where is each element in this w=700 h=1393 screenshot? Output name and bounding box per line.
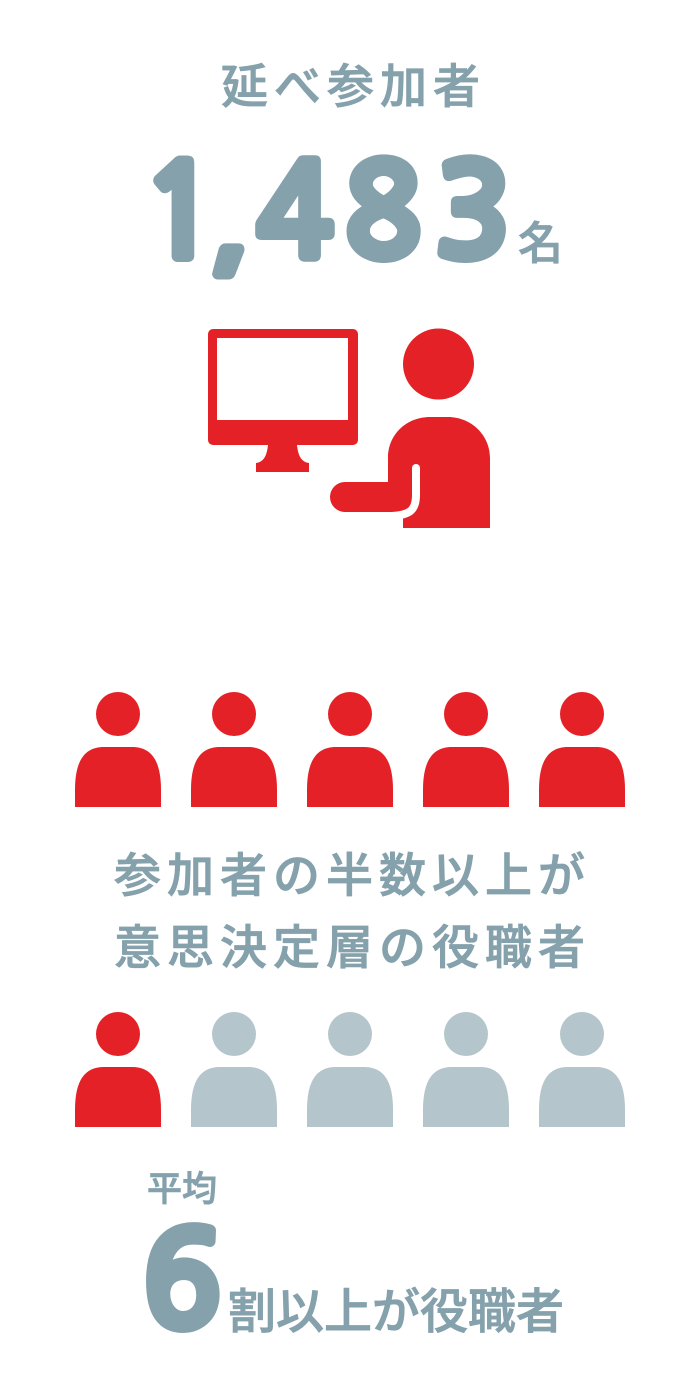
number: 1,483 participants: 8 bbox=[344, 150, 422, 277]
icon: person body bbox=[388, 417, 490, 528]
pictogram row: five red people bbox=[75, 692, 625, 807]
number: 1,483 participants: 3 bbox=[434, 150, 512, 277]
number: 1,483 participants bbox=[141, 150, 563, 277]
text: over half of participants are decision-making executives bbox=[114, 849, 591, 974]
statistic: over 60 percent are executives: 割以上が役職者 bbox=[228, 1286, 564, 1339]
icon: person head bbox=[403, 328, 474, 400]
number: 1,483 participants: 1 bbox=[141, 150, 219, 277]
number: 1,483 participants: 名 bbox=[518, 218, 563, 269]
pictogram row: one red and four grey people bbox=[75, 1012, 625, 1127]
statistic: over 60 percent are executives: 6 bbox=[142, 1217, 222, 1347]
text: over half of participants are decision-making executives: 意思決定層の役職者 bbox=[114, 921, 591, 974]
icon: person arm bbox=[330, 482, 400, 512]
label: average: 平均 bbox=[147, 1170, 217, 1209]
number: 1,483 participants: 4 bbox=[256, 150, 334, 277]
icon: monitor bbox=[208, 329, 358, 472]
icon: arm outline bbox=[392, 468, 416, 516]
text: over half of participants are decision-making executives: 参加者の半数以上が bbox=[114, 849, 591, 902]
statistic: over 60 percent are executives bbox=[142, 1217, 564, 1347]
icon: person at computer bbox=[208, 328, 490, 528]
number: 1,483 participants: , bbox=[210, 150, 248, 277]
heading: total participants: 延べ参加者 bbox=[221, 60, 486, 113]
